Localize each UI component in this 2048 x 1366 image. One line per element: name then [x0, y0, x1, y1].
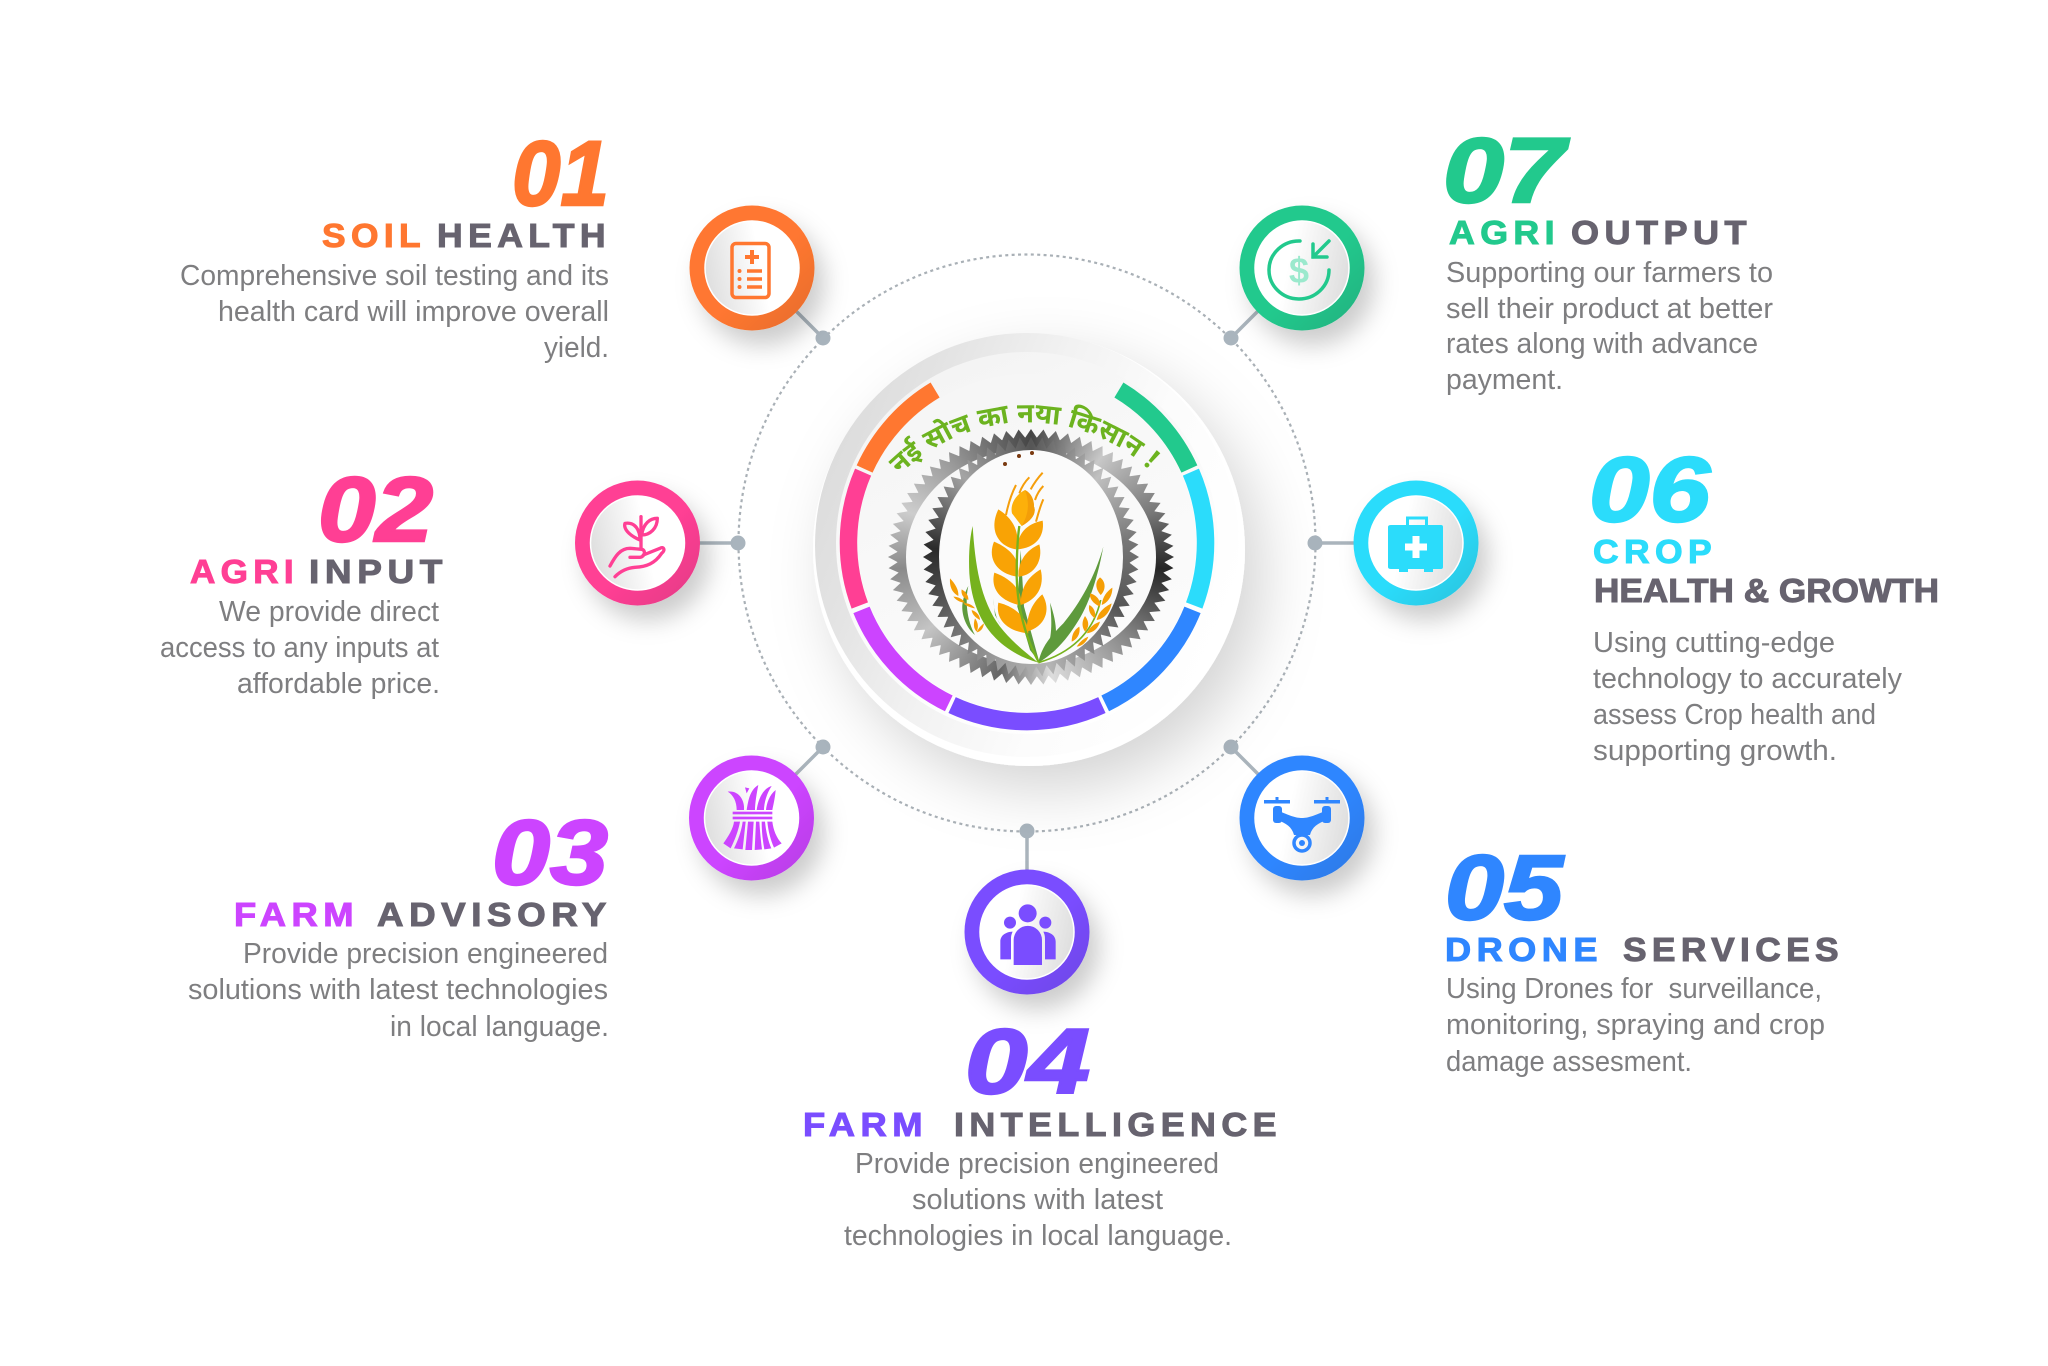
heading: agri output: OUTPUT	[1571, 214, 1752, 251]
segmented colour ring	[848, 390, 1206, 722]
heading: drone services: DRONE	[1445, 931, 1603, 968]
icon: 04 group of people	[964, 870, 1090, 994]
description: rates along with advance	[1446, 328, 1758, 360]
heading: farm advisory: ADVISORY	[377, 896, 612, 933]
heading: crop health and growth	[1593, 533, 1939, 609]
description: solutions with latest	[912, 1184, 1163, 1216]
description: payment.	[1446, 364, 1563, 396]
icon: 03 wheat sheaf	[689, 756, 814, 880]
description	[1446, 973, 1825, 1078]
description: damage assesment.	[1446, 1046, 1692, 1078]
curved Hindi tagline: नई सोच का नया किसान !	[888, 404, 1160, 469]
icon: 07 dollar return: $	[1289, 250, 1309, 291]
icon: 01 soil report card	[690, 206, 814, 330]
description: sell their product at better	[1446, 293, 1774, 325]
heading: soil health: SOIL	[322, 217, 426, 254]
description: solutions with latest technologies	[188, 974, 608, 1006]
wheat emblem	[940, 450, 1123, 664]
small brown dots	[1003, 451, 1034, 466]
description	[160, 596, 440, 700]
central disk	[813, 333, 1245, 766]
number 01: 01	[512, 123, 609, 225]
dotted orbit with connector nodes	[695, 254, 1360, 875]
heading: agri output	[1449, 214, 1752, 251]
heading: farm intelligence: FARM	[803, 1106, 928, 1143]
number 03: 03	[492, 802, 608, 904]
description: affordable price.	[237, 668, 440, 700]
number 04: 04	[965, 1011, 1090, 1113]
description	[1593, 627, 1903, 767]
description: supporting growth.	[1593, 735, 1837, 767]
description: Provide precision engineered	[855, 1148, 1219, 1180]
description: assess Crop health and	[1593, 699, 1876, 731]
panel: 05 drone services	[1445, 837, 1844, 1078]
heading: crop health and growth: HEALTH & GROWTH	[1594, 572, 1939, 609]
heading: farm intelligence	[803, 1106, 1282, 1143]
description: monitoring, spraying and crop	[1446, 1009, 1825, 1041]
heading: drone services: SERVICES	[1623, 931, 1844, 968]
outer metal gear	[888, 429, 1174, 685]
number 07: 07	[1443, 120, 1570, 222]
number 02: 02	[318, 459, 433, 561]
description: Supporting our farmers to	[1446, 257, 1773, 289]
heading: agri output: AGRI	[1449, 214, 1560, 251]
heading: farm intelligence: INTELLIGENCE	[954, 1106, 1282, 1143]
description	[1446, 257, 1774, 396]
heading: agri input	[190, 553, 448, 590]
description: Using cutting-edge	[1593, 627, 1835, 659]
description: health card will improve overall	[218, 296, 609, 328]
description	[188, 938, 609, 1043]
description: technologies in local language.	[844, 1220, 1232, 1252]
heading: farm advisory: FARM	[234, 896, 359, 933]
description	[180, 260, 609, 364]
description: Provide precision engineered	[243, 938, 608, 970]
heading: soil health: HEALTH	[437, 217, 611, 254]
description: Using Drones for surveillance,	[1446, 973, 1822, 1005]
icon: 05 drone	[1240, 756, 1364, 880]
panel: 06 crop health and growth	[1589, 439, 1939, 767]
icon: 02 hand with seedling	[575, 480, 700, 606]
panel: 03 farm advisory	[188, 802, 612, 1043]
inner metal gear	[923, 438, 1139, 676]
heading: farm advisory	[234, 896, 612, 933]
number 05: 05	[1445, 837, 1565, 939]
icon: 06 first aid kit	[1354, 480, 1478, 606]
description: We provide direct	[219, 596, 439, 628]
description: in local language.	[390, 1011, 609, 1043]
description: access to any inputs at	[160, 632, 439, 664]
panel: 01 soil health	[180, 123, 611, 364]
description: Comprehensive soil testing and its	[180, 260, 609, 292]
heading: drone services	[1445, 931, 1844, 968]
panel: 07 agri output	[1443, 120, 1774, 396]
heading: agri input: INPUT	[309, 553, 448, 590]
icon: 07 dollar return	[1240, 206, 1364, 330]
heading: soil health	[322, 217, 611, 254]
heading: agri input: AGRI	[190, 553, 299, 590]
description	[844, 1148, 1232, 1252]
description: technology to accurately	[1593, 663, 1903, 695]
panel: 04 farm intelligence	[803, 1011, 1282, 1252]
number 06: 06	[1589, 439, 1711, 541]
panel: 02 agri input	[160, 459, 448, 700]
description: yield.	[544, 332, 609, 364]
heading: crop health and growth: CROP	[1593, 533, 1717, 570]
